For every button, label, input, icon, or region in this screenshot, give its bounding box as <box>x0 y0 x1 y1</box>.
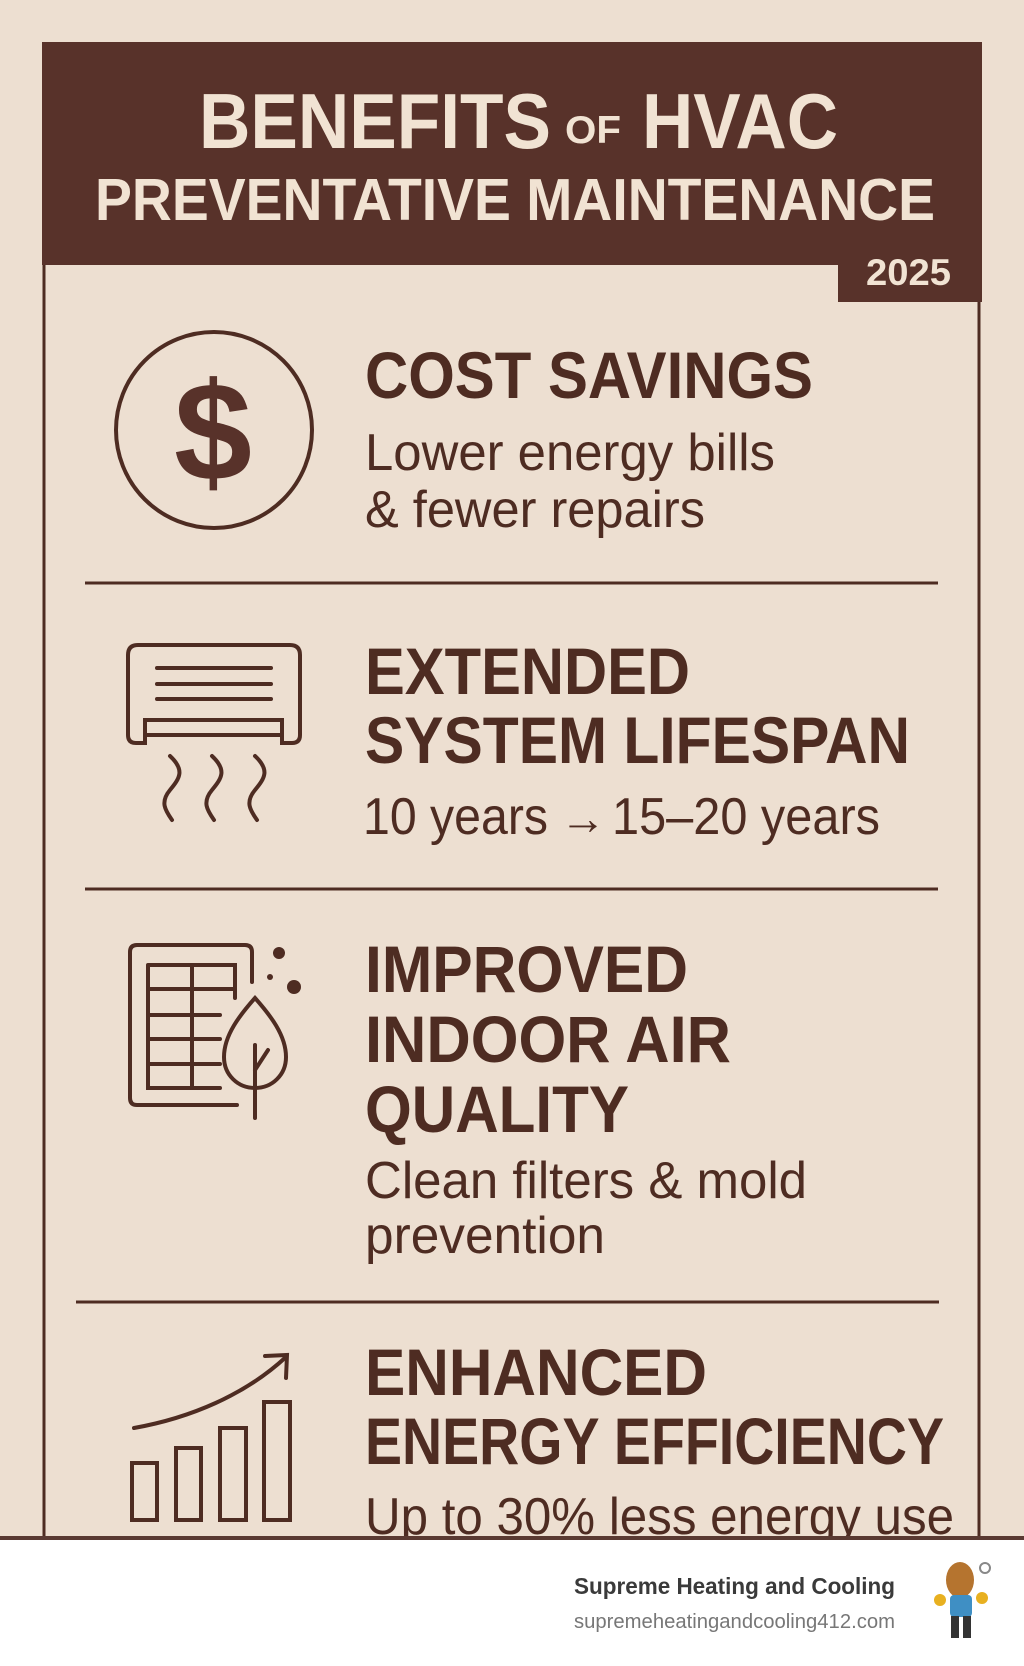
section: lifespan <box>128 634 910 846</box>
title: PREVENTATIVE MAINTENANCE <box>95 167 935 233</box>
title: OF <box>565 109 621 152</box>
text: air quality: prevention <box>365 1207 605 1265</box>
section: energy efficiency <box>130 1349 952 1536</box>
heading: lifespan: SYSTEM LIFESPAN <box>365 703 910 777</box>
icon: bar chart with arrow <box>132 1355 290 1520</box>
heading: lifespan: EXTENDED <box>365 634 690 708</box>
text: air quality <box>365 1152 807 1265</box>
text: air quality: Clean filters & mold <box>365 1152 807 1210</box>
heading: energy efficiency <box>365 1335 944 1478</box>
footer: company info <box>574 1573 895 1633</box>
title <box>95 77 935 233</box>
heading: energy efficiency: ENHANCED <box>365 1335 707 1409</box>
year tag: 2025 <box>866 252 951 293</box>
text: lifespan: 15–20 years <box>612 788 880 846</box>
text: energy efficiency: Up to 30% less energy use <box>365 1488 954 1546</box>
heading: cost savings: COST SAVINGS <box>365 338 813 412</box>
heading: air quality: IMPROVED <box>365 932 688 1006</box>
header banner <box>42 42 982 302</box>
icon: dollar coin <box>116 332 312 528</box>
text: lifespan <box>363 788 880 846</box>
section: air quality <box>130 932 807 1265</box>
icon: mascot <box>934 1562 990 1638</box>
text: cost savings: & fewer repairs <box>365 481 705 539</box>
footer: company info: Supreme Heating and Cooling <box>574 1573 895 1599</box>
heading: air quality <box>365 932 731 1146</box>
text: cost savings <box>365 424 775 539</box>
text: lifespan: → <box>560 792 606 844</box>
heading: lifespan <box>365 634 910 777</box>
icon: AC unit <box>128 645 300 820</box>
heading: air quality: INDOOR AIR <box>365 1002 731 1076</box>
text: cost savings: Lower energy bills <box>365 424 775 482</box>
title: HVAC <box>642 77 838 165</box>
title: BENEFITS <box>199 77 551 165</box>
icon: dollar coin: $ <box>174 353 252 510</box>
text: lifespan: 10 years <box>363 788 548 846</box>
footer: company info: supremeheatingandcooling412.com <box>574 1611 895 1633</box>
heading: air quality: QUALITY <box>365 1072 629 1146</box>
icon: filter and leaf <box>130 945 286 1118</box>
section: cost savings <box>116 332 813 539</box>
